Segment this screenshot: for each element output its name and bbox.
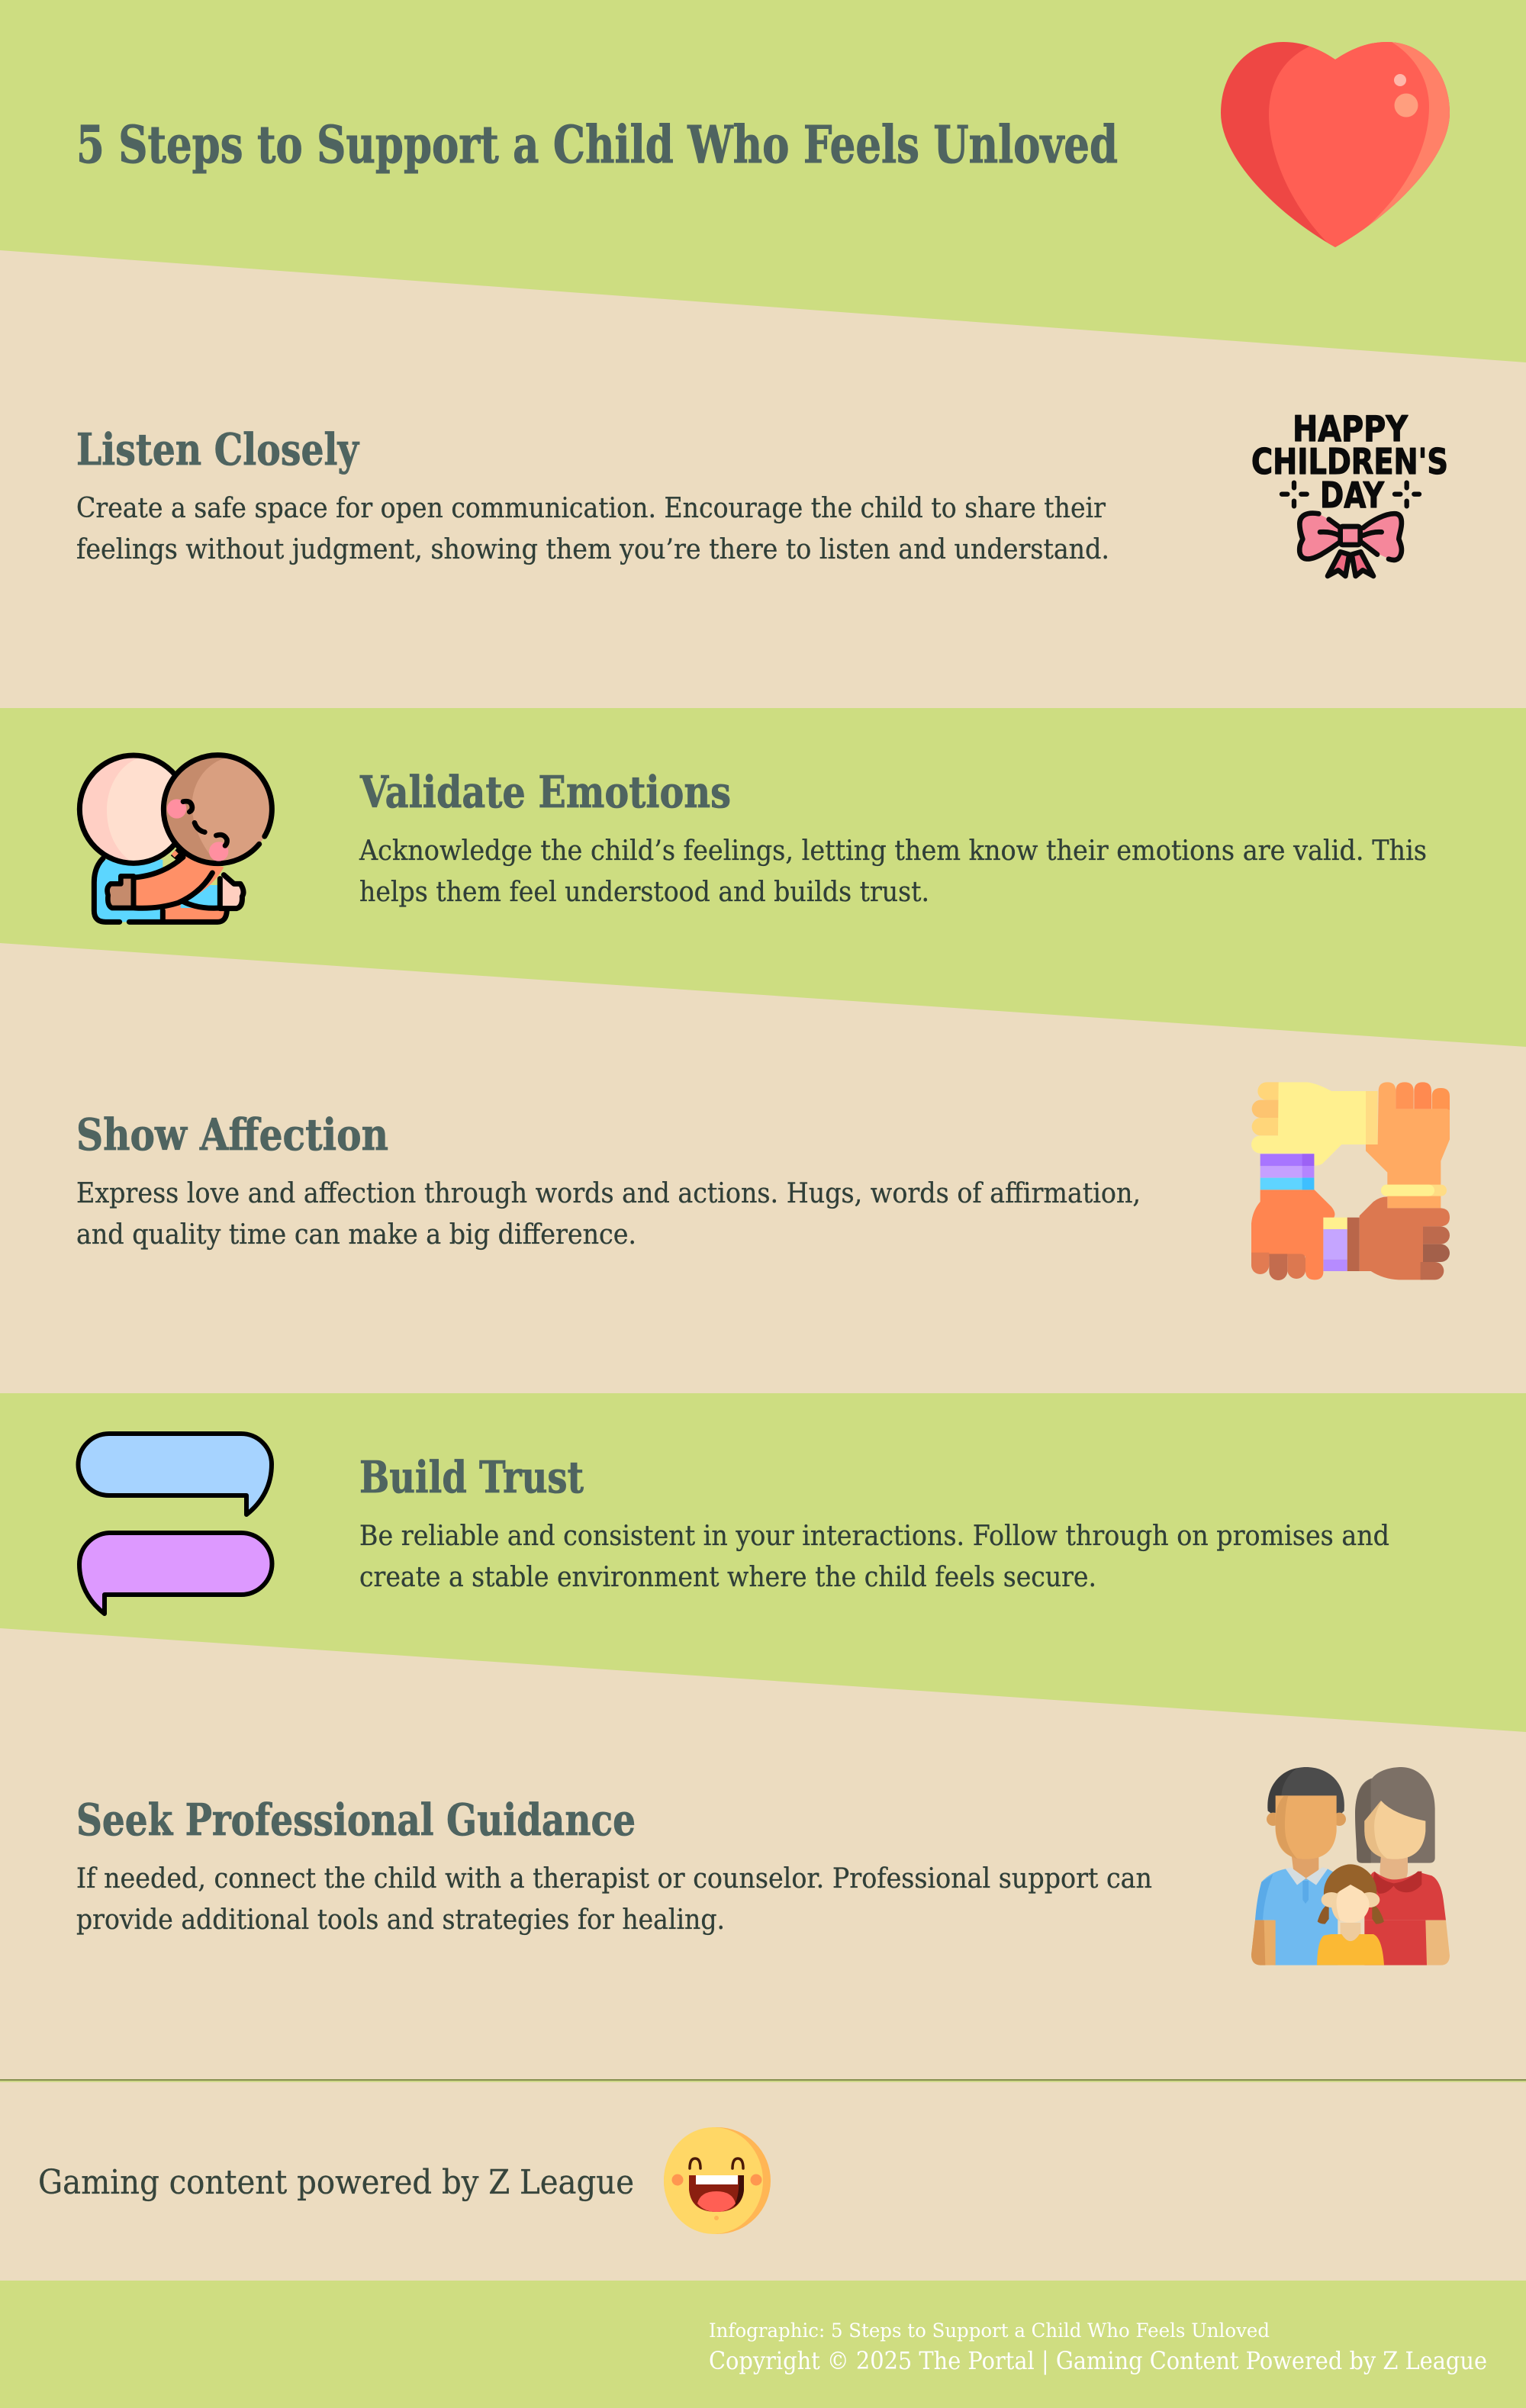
blue speech bubble (78, 1434, 272, 1515)
step 4 heading: Build Trust (359, 1452, 584, 1503)
purple speech bubble (79, 1533, 272, 1614)
step 3: show affection (76, 1109, 1141, 1251)
footer infographic credit: Infographic: 5 Steps to Support a Child Who Feels Unloved (709, 2319, 1270, 2342)
step 3 body text: and quality time can make a big difference. (76, 1219, 636, 1251)
icon: happy children's day bow (1251, 408, 1448, 576)
band: validate emotions (0, 708, 1526, 1047)
step 2 body text: helps them feel understood and builds trust. (359, 877, 929, 908)
step 1 body text: feelings without judgment, showing them you’re there to listen and understand. (76, 534, 1109, 565)
step 3 body text (76, 1178, 1141, 1251)
step 4 body text: create a stable environment where the child feels secure. (359, 1562, 1096, 1593)
step 5 body text: provide additional tools and strategies for healing. (76, 1904, 725, 1936)
step 4: build trust (359, 1452, 1389, 1593)
icon: happy children's day bow: DAY (1320, 475, 1385, 516)
step 1 body text (76, 493, 1109, 565)
step 5 heading: Seek Professional Guidance (76, 1795, 636, 1846)
icon: four hands (1251, 1082, 1450, 1280)
step 3 body text: Express love and affection through words and actions. Hugs, words of affirmation, (76, 1178, 1141, 1209)
step 5: seek professional guidance (76, 1795, 1152, 1936)
step 4 body text: Be reliable and consistent in your interactions. Follow through on promises and (359, 1521, 1389, 1552)
step 5 body text: If needed, connect the child with a therapist or counselor. Professional support can (76, 1863, 1152, 1895)
icon: laughing emoji (664, 2127, 771, 2234)
icon: happy children's day bow: HAPPY (1293, 408, 1408, 449)
header band (0, 0, 1526, 362)
band: build trust (0, 1393, 1526, 1732)
powered by text: Gaming content powered by Z League (38, 2163, 634, 2202)
footer band (0, 2281, 1526, 2408)
footer divider line (0, 2079, 1526, 2082)
step 4 body text (359, 1521, 1389, 1593)
step 1 body text: Create a safe space for open communication. Encourage the child to share their (76, 493, 1106, 524)
step 1: listen closely (76, 424, 1109, 565)
icon: happy children's day bow: CHILDREN'S (1251, 441, 1448, 482)
step 2 body text (359, 835, 1427, 908)
step 2 heading: Validate Emotions (359, 767, 731, 818)
icon: heart (1221, 42, 1450, 247)
icon: family (1251, 1767, 1450, 1965)
step 2: validate emotions (359, 767, 1427, 908)
step 2 body text: Acknowledge the child’s feelings, letting them know their emotions are valid. This (359, 835, 1427, 867)
step 1 heading: Listen Closely (76, 424, 360, 475)
title: 5 Steps to Support a Child Who Feels Unloved (76, 114, 1118, 175)
icon: speech bubbles (78, 1434, 272, 1614)
step 3 heading: Show Affection (76, 1109, 388, 1161)
step 5 body text (76, 1863, 1152, 1936)
icon: hugging children (79, 755, 272, 922)
